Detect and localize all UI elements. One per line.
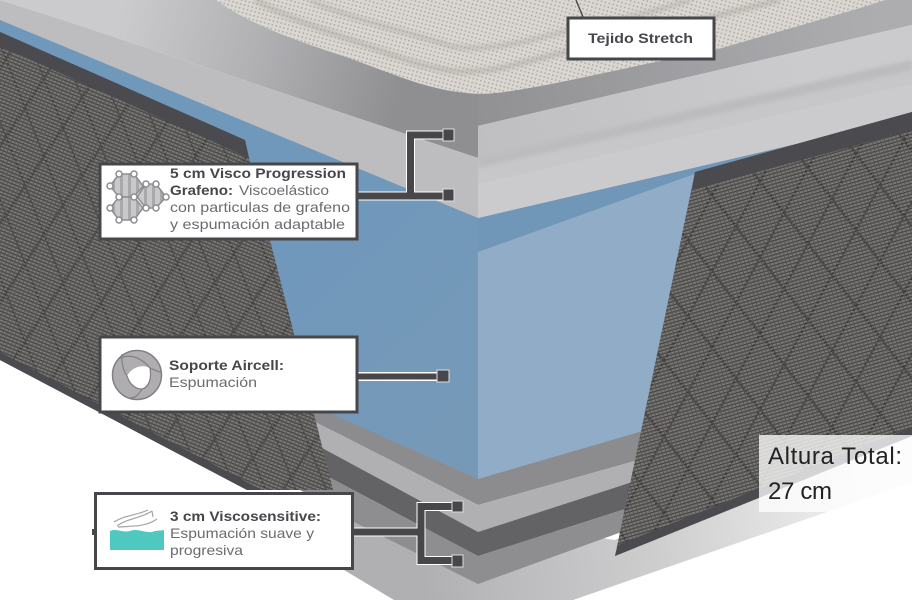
callout text — [169, 357, 284, 390]
total height label — [759, 435, 912, 512]
connector: Visco Progression — [358, 129, 454, 201]
callout text: Grafeno: — [170, 182, 233, 198]
callout text: Soporte Aircell: — [169, 357, 284, 373]
total height label: Altura Total: — [768, 443, 902, 470]
callout text: Espumación — [169, 374, 257, 390]
connector: Viscosensitive — [354, 501, 463, 567]
icon: graphene hexagons — [107, 171, 169, 223]
callout: Visco Progression Grafeno — [100, 164, 357, 239]
icon: aircell shutter — [112, 350, 162, 400]
left mattress side panel — [0, 32, 333, 490]
total height label: 27 cm — [768, 478, 832, 505]
callout text — [170, 165, 350, 232]
callout: Tejido Stretch: Tejido Stretch — [588, 30, 693, 46]
callout text: progresiva — [170, 542, 243, 558]
callout text: 3 cm Viscosensitive: — [170, 508, 321, 524]
callout: Tejido Stretch — [568, 18, 714, 59]
icon: hand on foam — [110, 510, 164, 550]
callout text: Espumación suave y — [170, 525, 314, 541]
callout text — [170, 508, 321, 558]
right mattress side panel — [615, 112, 912, 556]
blue support foam block — [0, 10, 912, 479]
connector: Soporte Aircell — [358, 370, 449, 382]
callout: Viscosensitive — [92, 494, 352, 568]
callout text: Viscoelástico — [239, 182, 329, 198]
floor shadow — [325, 420, 912, 600]
callout text: y espumación adaptable — [170, 216, 345, 232]
callout text: 5 cm Visco Progression — [170, 165, 346, 181]
top foam slab: Visco Progression Grafeno — [0, 0, 912, 218]
callout: Soporte Aircell — [100, 337, 357, 412]
stretch fabric cover — [216, 0, 885, 94]
callout text: con particulas de grafeno — [170, 199, 350, 215]
bottom foam layers — [296, 398, 660, 584]
